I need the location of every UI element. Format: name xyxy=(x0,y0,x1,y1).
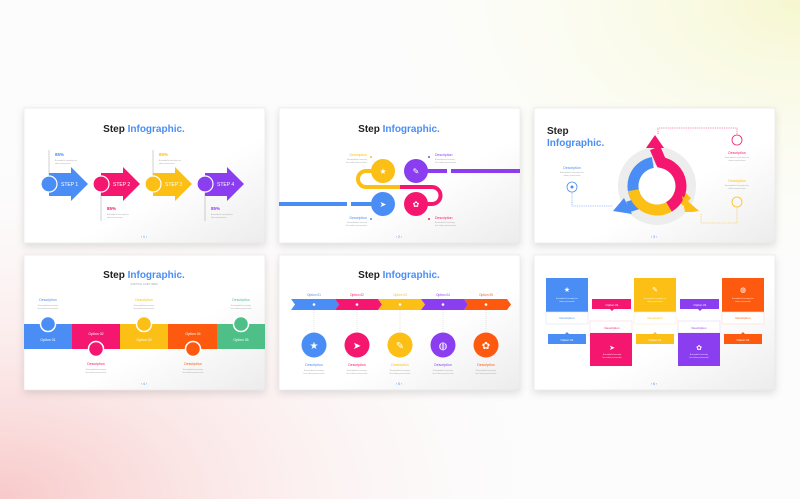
band xyxy=(24,324,265,349)
panel: slide 4 band xyxy=(24,255,265,390)
descriptions: Description xyxy=(728,179,746,183)
column blue: taken possession xyxy=(559,300,575,303)
descriptions: has taken possession xyxy=(435,161,457,164)
step 3: STEP 3 xyxy=(165,182,182,188)
title: Step Infographic. xyxy=(358,124,440,135)
panel: slide 4 band: Option 03 xyxy=(136,338,152,342)
panel: slide 5 chevrons: Option 05 xyxy=(479,293,493,297)
descriptions: Description xyxy=(477,363,495,367)
step 3: taken possession xyxy=(159,162,174,165)
ring xyxy=(627,156,687,216)
column pink: Option 01 xyxy=(605,303,619,307)
descriptions: has taken possession xyxy=(435,224,457,227)
column orange xyxy=(722,278,764,344)
column blue: ★ xyxy=(564,286,570,294)
descriptions: has taken possession xyxy=(346,161,368,164)
column orange: taken possession xyxy=(735,300,751,303)
step 1: A wonderful serenity has xyxy=(55,159,77,162)
step 3 xyxy=(145,150,192,201)
step 2: STEP 2 xyxy=(113,182,130,188)
column yellow: Description xyxy=(647,316,663,320)
column orange: Description xyxy=(735,316,751,320)
column yellow: Option 01 xyxy=(648,338,662,342)
chevrons xyxy=(291,299,511,310)
descriptions: Description xyxy=(391,363,409,367)
descriptions: taken possession xyxy=(564,174,581,177)
column pink xyxy=(590,299,632,366)
column yellow xyxy=(634,278,676,344)
descriptions: A wonderful serenity xyxy=(183,368,204,371)
step 4 xyxy=(197,167,244,221)
descriptions: A wonderful serenity xyxy=(134,304,155,307)
panel: slide 3 cycle: Infographic. xyxy=(547,138,604,149)
column yellow: A wonderful serenity has xyxy=(644,297,666,300)
descriptions: Description xyxy=(435,216,453,220)
column blue: Description xyxy=(559,316,575,320)
column purple xyxy=(678,299,720,366)
panel: slide 2 road: ‹ 2 › xyxy=(396,235,403,239)
circles xyxy=(371,159,428,216)
column purple: Description xyxy=(691,326,707,330)
column orange: A wonderful serenity has xyxy=(732,297,754,300)
descriptions: has taken possession xyxy=(346,224,368,227)
column blue: A wonderful serenity has xyxy=(556,297,578,300)
column blue xyxy=(546,278,588,344)
descriptions: Description xyxy=(349,153,367,157)
step 2: 85% xyxy=(107,206,116,211)
column purple: ✿ xyxy=(696,345,702,352)
descriptions: A wonderful serenity xyxy=(347,221,368,224)
descriptions: taken possession xyxy=(729,159,746,162)
descriptions xyxy=(37,298,252,374)
road xyxy=(279,171,520,204)
descriptions: Description xyxy=(434,363,452,367)
icon circles: ✿ xyxy=(482,341,490,352)
panel: slide 6 boxes xyxy=(534,255,775,390)
descriptions: Description xyxy=(39,298,57,302)
descriptions: has taken possession xyxy=(182,371,204,374)
step 3: 85% xyxy=(159,152,168,157)
descriptions: A wonderful serenity xyxy=(435,158,456,161)
descriptions xyxy=(303,363,497,375)
step 2 xyxy=(93,167,140,221)
descriptions: Description xyxy=(135,298,153,302)
step 4: STEP 4 xyxy=(217,182,234,188)
descriptions: A wonderful serenity has xyxy=(725,156,750,159)
descriptions: Description xyxy=(87,362,105,366)
step 3: A wonderful serenity has xyxy=(159,159,181,162)
panel: slide 4 band: ‹ 4 › xyxy=(141,382,148,386)
step 2: taken possession xyxy=(107,216,122,219)
descriptions: has taken possession xyxy=(346,372,368,375)
descriptions: A wonderful serenity xyxy=(476,369,497,372)
title: Step Infographic. xyxy=(103,270,185,281)
icon circles: ➤ xyxy=(353,341,361,352)
circles: ★ xyxy=(379,167,387,176)
descriptions: has taken possession xyxy=(303,372,325,375)
descriptions: has taken possession xyxy=(389,372,411,375)
icon circles: ✎ xyxy=(396,341,404,352)
title: Step Infographic. xyxy=(103,124,185,135)
column orange: ◍ xyxy=(740,287,746,294)
descriptions: Description xyxy=(728,151,746,155)
panel: slide 5 chevrons: Option 01 xyxy=(307,293,321,297)
descriptions: has taken possession xyxy=(475,372,497,375)
panel: slide 1 arrows xyxy=(24,108,265,243)
title: Step Infographic. xyxy=(358,270,440,281)
descriptions: A wonderful serenity has xyxy=(560,171,585,174)
panel: slide 5 chevrons: Option 02 xyxy=(350,293,364,297)
descriptions xyxy=(560,151,750,190)
descriptions: has taken possession xyxy=(85,371,107,374)
panel: slide 4 band: SUBTITLE GOES HERE xyxy=(130,283,158,286)
icons xyxy=(567,135,742,207)
panel: slide 4 band: Option 04 xyxy=(185,332,201,336)
page number: ‹ 1 › xyxy=(141,235,148,239)
panel: slide 6 boxes: ‹ 6 › xyxy=(651,382,658,386)
column pink: ➤ xyxy=(609,345,615,352)
panel: slide 5 chevrons: Option 03 xyxy=(393,293,407,297)
step 1: 85% xyxy=(55,152,64,157)
panel: slide 3 cycle: ‹ 3 › xyxy=(651,235,658,239)
descriptions: has taken possession xyxy=(133,307,155,310)
cycle arrows xyxy=(628,148,687,210)
descriptions: Description xyxy=(305,363,323,367)
step 4: 85% xyxy=(211,206,220,211)
descriptions: A wonderful serenity xyxy=(86,368,107,371)
panel: slide 2 road xyxy=(279,108,520,243)
column pink: Description xyxy=(604,326,620,330)
icon circles: ◍ xyxy=(439,341,448,352)
panel: slide 3 cycle xyxy=(534,108,775,243)
band circles xyxy=(40,316,248,356)
descriptions: Description xyxy=(184,362,202,366)
icon circles xyxy=(302,332,498,358)
panel: slide 5 chevrons: ‹ 5 › xyxy=(396,382,403,386)
descriptions: Description xyxy=(232,298,250,302)
descriptions: taken possession xyxy=(729,187,746,190)
step 1: STEP 1 xyxy=(61,182,78,188)
descriptions: A wonderful serenity xyxy=(433,369,454,372)
column purple: A wonderful serenity xyxy=(690,353,708,356)
descriptions xyxy=(346,153,457,227)
descriptions: A wonderful serenity xyxy=(390,369,411,372)
step 1 xyxy=(41,150,88,201)
descriptions: has taken possession xyxy=(37,307,59,310)
panel: slide 5 chevrons xyxy=(279,255,520,390)
step 4: A wonderful serenity has xyxy=(211,213,233,216)
panel: slide 4 band: Option 01 xyxy=(40,338,56,342)
column purple: Option 01 xyxy=(693,303,707,307)
column orange: Option 01 xyxy=(736,338,750,342)
title: Step xyxy=(547,126,569,137)
icon circles: ★ xyxy=(310,341,319,352)
panel: slide 4 band: Option 05 xyxy=(233,338,249,342)
connectors xyxy=(572,128,737,223)
step 4: taken possession xyxy=(211,216,226,219)
descriptions: A wonderful serenity xyxy=(347,369,368,372)
descriptions: A wonderful serenity xyxy=(231,304,252,307)
panel: slide 5 chevrons: Option 04 xyxy=(436,293,450,297)
circles: ✎ xyxy=(413,167,419,176)
step 2: A wonderful serenity has xyxy=(107,213,129,216)
descriptions: Description xyxy=(563,166,581,170)
descriptions: has taken possession xyxy=(432,372,454,375)
circles: ➤ xyxy=(380,200,387,209)
descriptions: Description xyxy=(348,363,366,367)
column pink: has taken possession xyxy=(602,356,622,359)
descriptions: A wonderful serenity xyxy=(304,369,325,372)
descriptions: has taken possession xyxy=(230,307,252,310)
descriptions: Description xyxy=(435,153,453,157)
column purple: has taken possession xyxy=(689,356,709,359)
descriptions: A wonderful serenity xyxy=(38,304,59,307)
column blue: Option 01 xyxy=(560,338,574,342)
circles: ✿ xyxy=(413,200,420,209)
column yellow: taken possession xyxy=(647,300,663,303)
descriptions: A wonderful serenity has xyxy=(725,184,750,187)
descriptions: Description xyxy=(349,216,367,220)
step 1: taken possession xyxy=(55,162,70,165)
panel: slide 4 band: Option 02 xyxy=(88,332,104,336)
descriptions: A wonderful serenity xyxy=(435,221,456,224)
column yellow: ✎ xyxy=(652,287,658,294)
descriptions: A wonderful serenity xyxy=(347,158,368,161)
column pink: A wonderful serenity xyxy=(603,353,621,356)
